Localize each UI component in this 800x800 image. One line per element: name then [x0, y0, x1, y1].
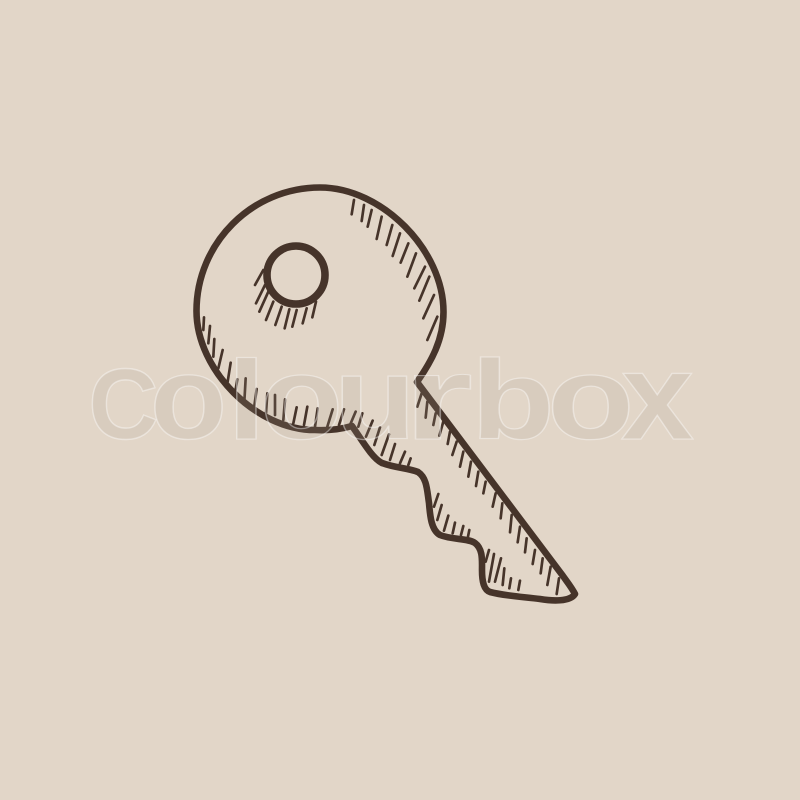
watermark: Colourbox: x: [621, 328, 694, 466]
watermark: Colourbox: o: [547, 331, 634, 464]
watermark: Colourbox: o: [150, 332, 227, 464]
hatching: hole underside: [255, 270, 316, 328]
watermark: Colourbox: r: [403, 332, 473, 465]
hatching: key blade: [366, 393, 559, 594]
watermark: Colourbox: C: [88, 348, 158, 460]
watermark: Colourbox: o: [260, 332, 343, 464]
hatching: head upper right: [352, 200, 437, 340]
hatching: head lower left: [203, 317, 362, 427]
watermark: Colourbox: b: [471, 337, 555, 463]
watermark: Colourbox: u: [334, 332, 416, 464]
watermark: Colourbox: [88, 328, 694, 466]
key hole: [267, 246, 325, 304]
key outline: [196, 188, 575, 600]
watermark: Colourbox: l: [227, 337, 266, 463]
icon: key: [196, 188, 575, 600]
